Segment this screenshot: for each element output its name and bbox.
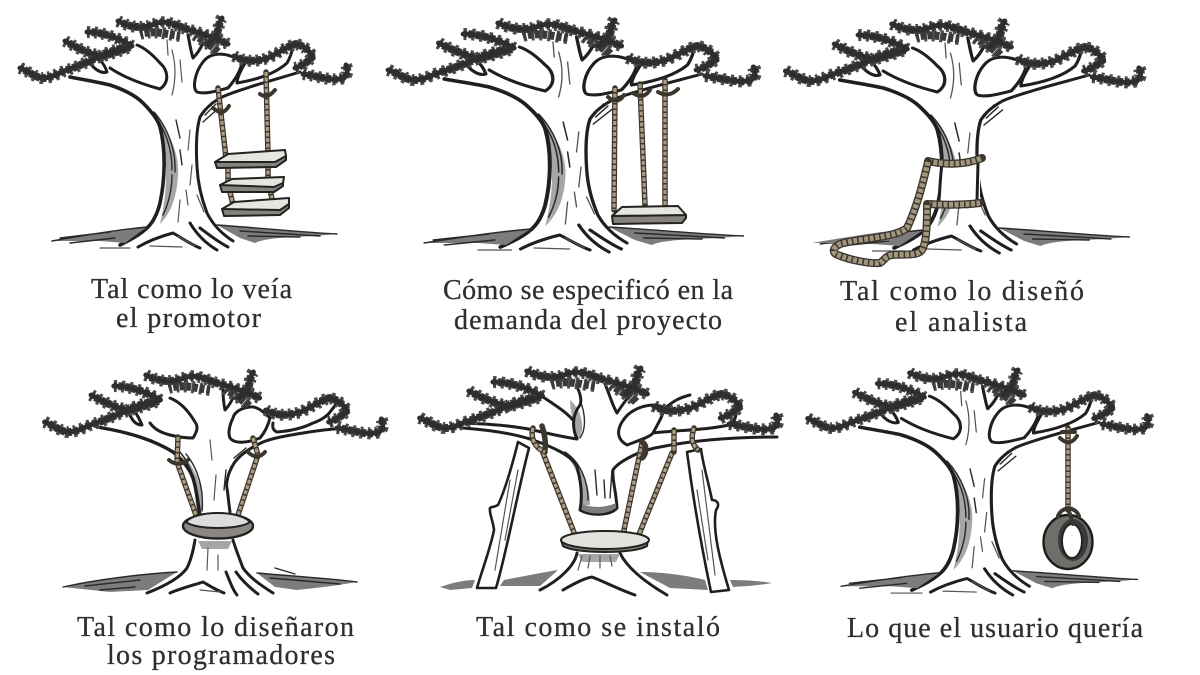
panel: as the programmers designed it — [45, 372, 383, 671]
caption — [443, 275, 734, 336]
left and right wooden supports — [477, 442, 729, 592]
panel: as specified in the project request — [388, 20, 755, 336]
panel: what the user wanted — [808, 370, 1148, 644]
caption: Cómo se especificó en la — [443, 275, 734, 306]
rope — [1060, 428, 1077, 510]
swing seat — [612, 206, 686, 224]
extra ground shadow — [812, 228, 912, 243]
panel: as the promoter saw it — [20, 18, 347, 334]
caption — [91, 274, 293, 334]
tree — [20, 18, 347, 250]
tire swing — [1044, 508, 1092, 569]
tree — [786, 21, 1140, 253]
stump and ground — [440, 553, 772, 595]
panel: as the analyst designed it — [786, 21, 1140, 338]
caption: Tal como se instaló — [476, 612, 720, 643]
tree — [388, 20, 755, 252]
caption: los programadores — [107, 640, 335, 671]
tree — [808, 370, 1148, 595]
caption — [840, 276, 1084, 338]
caption: Tal como lo veía — [91, 274, 293, 305]
caption: el promotor — [116, 303, 262, 334]
rope wrapped around trunk and trailing to ground — [834, 158, 982, 263]
caption: Lo que el usuario quería — [847, 613, 1144, 644]
trunk edges between bands — [939, 164, 978, 200]
caption — [77, 612, 354, 671]
cleared trunk section — [938, 162, 980, 202]
tree with cut trunk — [420, 368, 778, 514]
swing seat — [561, 531, 649, 552]
three ropes — [608, 80, 678, 210]
ropes to the swing seat — [532, 426, 698, 537]
caption: el analista — [895, 307, 1028, 338]
panel: as it was installed — [420, 368, 778, 643]
swing seats — [215, 150, 289, 216]
ropes of the three-seat swing — [213, 72, 275, 205]
caption: Tal como lo diseñó — [840, 276, 1084, 307]
seat around the trunk — [183, 513, 253, 538]
caption: Tal como lo diseñaron — [77, 612, 354, 643]
caption: demanda del proyecto — [454, 305, 722, 336]
tree — [45, 372, 383, 595]
ropes from branches to tree swing — [169, 437, 265, 518]
